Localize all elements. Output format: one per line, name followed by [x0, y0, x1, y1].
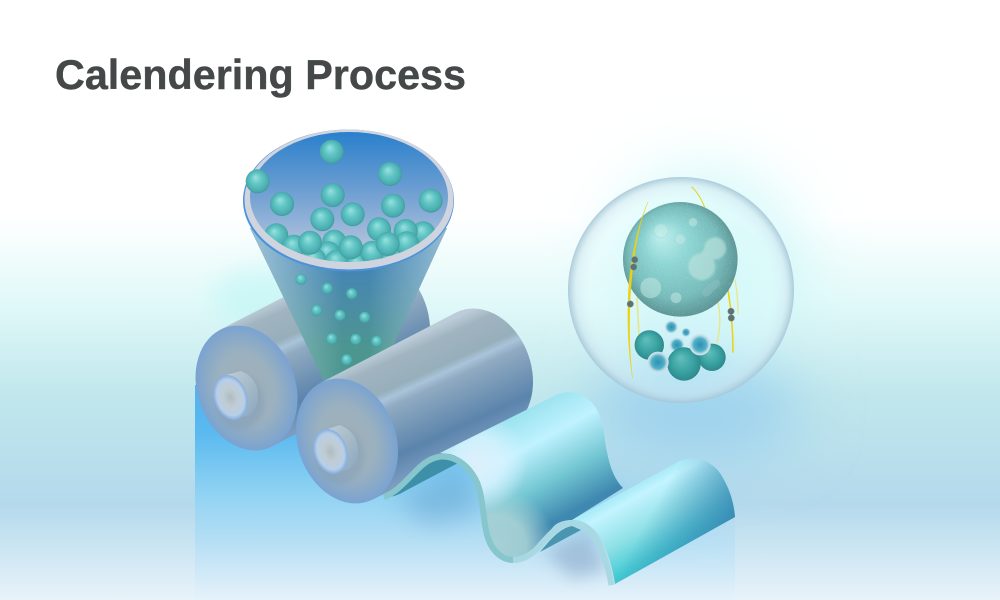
hub shadow	[216, 374, 264, 430]
binder fibres behind particle	[637, 187, 738, 352]
hub	[321, 425, 358, 474]
particle surface pits	[641, 218, 697, 303]
hub face	[208, 371, 253, 424]
cluster of small particles	[635, 320, 726, 381]
magnified bubble	[568, 177, 794, 403]
glow: behind magnified bubble	[590, 165, 805, 460]
particles piled in funnel	[265, 217, 434, 262]
roller end face	[179, 311, 314, 465]
sheet edge	[384, 457, 612, 585]
first hump underside	[384, 456, 458, 497]
funnel cone	[250, 228, 447, 437]
title: Calendering Process	[55, 51, 466, 98]
right roller	[279, 309, 533, 518]
hub shadow	[316, 428, 364, 484]
second hump underside	[540, 526, 581, 552]
hub	[222, 371, 258, 420]
particle surface blobs	[688, 237, 726, 280]
second hump surface	[572, 458, 735, 584]
bubble shell	[568, 177, 794, 403]
floor panel	[195, 385, 735, 600]
rolled sheet	[384, 392, 735, 585]
hub face	[308, 425, 353, 478]
binder fibre front	[628, 202, 648, 378]
funnel	[243, 130, 454, 381]
large active particle	[623, 202, 738, 317]
conductive additive dots	[627, 256, 734, 321]
left roller	[179, 257, 430, 465]
first hump surface	[440, 392, 623, 557]
particles floating above pile	[246, 140, 443, 231]
roller body	[220, 257, 430, 446]
funnel rim	[243, 130, 454, 272]
small particles in cone	[295, 274, 382, 365]
floor shadows	[395, 468, 606, 578]
roller end face	[279, 364, 415, 518]
roller body	[321, 309, 533, 499]
particle surface mark	[700, 278, 722, 298]
glow: behind funnel	[212, 268, 312, 328]
funnel interior	[250, 132, 448, 262]
